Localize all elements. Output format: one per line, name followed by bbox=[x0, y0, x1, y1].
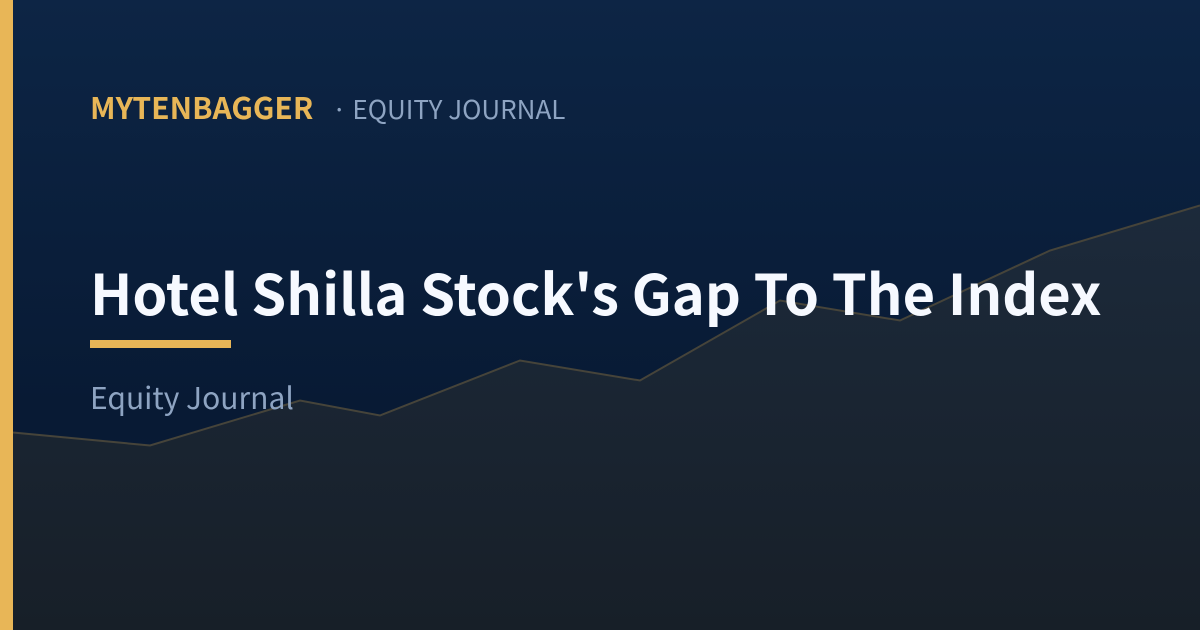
brand section label: · EQUITY JOURNAL bbox=[332, 90, 565, 127]
accent bar bbox=[0, 0, 13, 630]
title underline bbox=[90, 340, 231, 348]
title: Hotel Shilla Stock's Gap To The Index bbox=[90, 251, 1101, 332]
subtitle: Equity Journal bbox=[90, 374, 294, 418]
brand name: MYTENBAGGER bbox=[90, 84, 313, 128]
